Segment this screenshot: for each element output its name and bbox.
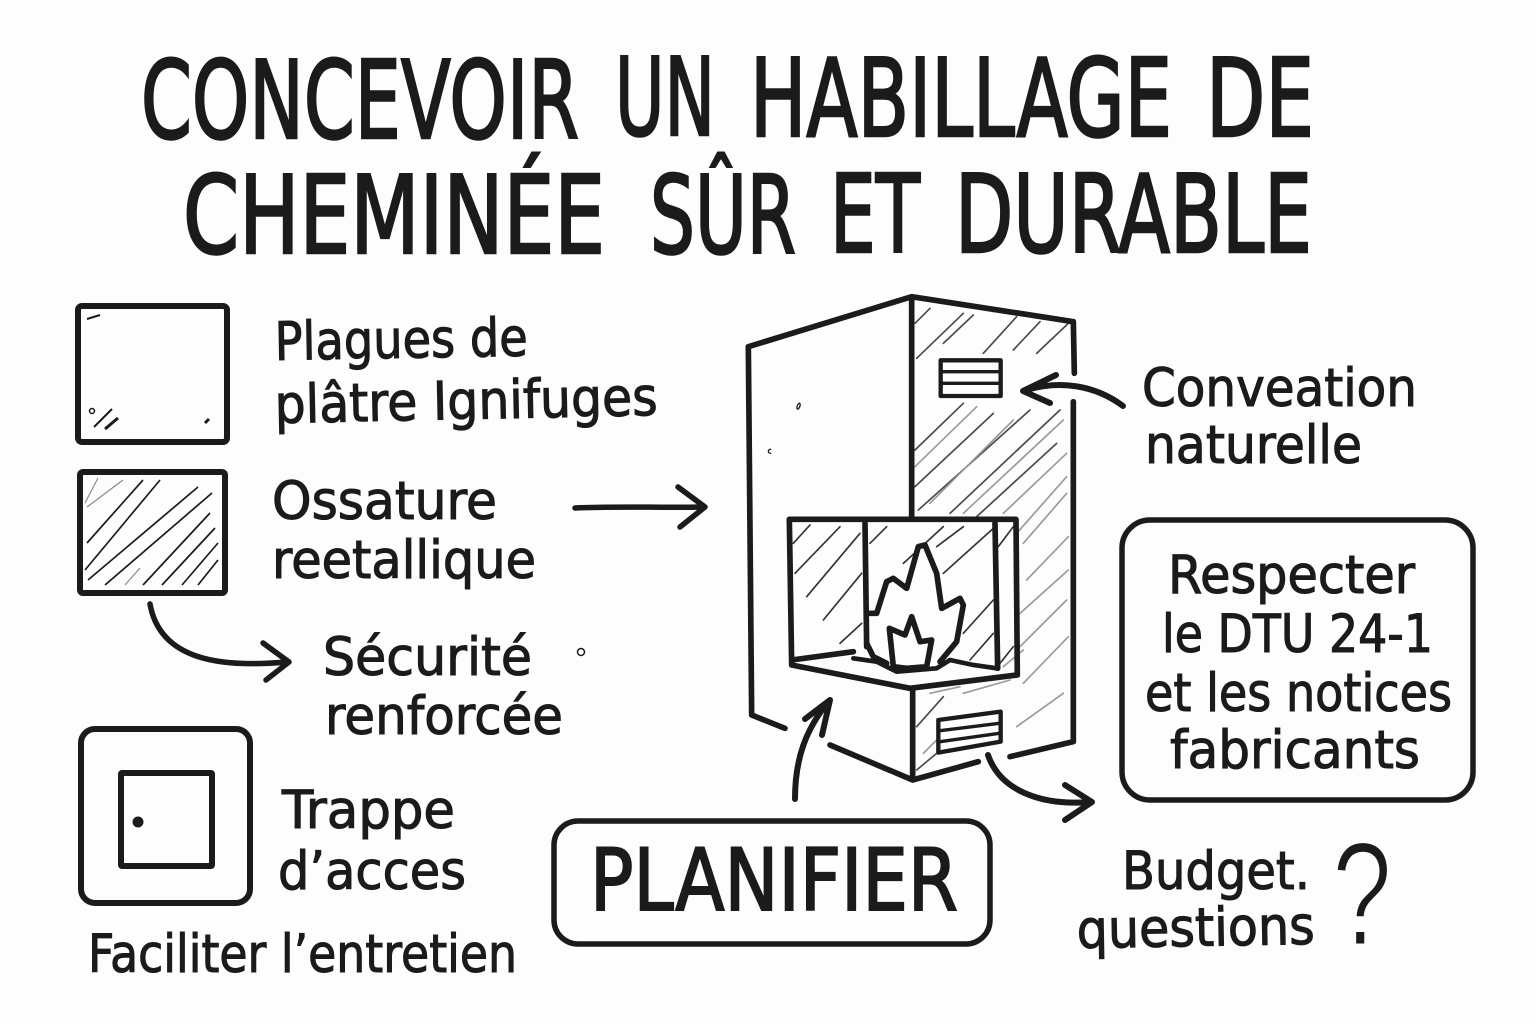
callout: DTU: Respecter	[1168, 545, 1415, 606]
label: budget questions: Budget.	[1122, 841, 1310, 902]
arrow: planifier to chimney	[795, 700, 830, 799]
title: UN	[615, 36, 715, 161]
label: trappe d'accès	[278, 780, 466, 902]
small dot	[578, 648, 584, 656]
vent: bottom	[938, 712, 1001, 753]
title: SÛR	[650, 152, 796, 279]
label: sécurité renforcée: renforcée	[325, 686, 563, 747]
label: ossature métallique: reetallique	[272, 530, 536, 591]
illustration: fireplace enclosure	[748, 297, 1074, 780]
callout: DTU: et les notices	[1145, 663, 1452, 724]
title: HABILLAGE	[750, 37, 1172, 162]
callout: DTU: fabricants	[1170, 720, 1420, 781]
label: plaques de plâtre: plâtre Ignifuges	[274, 367, 658, 436]
icon: flame	[867, 545, 963, 668]
hatching: side wall	[915, 308, 1068, 770]
label: convection naturelle: Conveation	[1142, 358, 1417, 419]
label: convection naturelle: naturelle	[1145, 415, 1362, 476]
label: budget questions: questions	[1076, 896, 1315, 961]
arrow: to sécurité	[150, 604, 289, 680]
title: ET	[830, 153, 921, 278]
title: CONCEVOIR	[141, 39, 579, 164]
label: plaques de plâtre	[274, 308, 658, 436]
panel: metal frame sample	[80, 472, 225, 593]
outer outline	[748, 297, 1074, 780]
label: convection naturelle	[1142, 358, 1417, 476]
label: trappe d'accès: Trappe	[281, 780, 455, 841]
specks	[768, 403, 800, 453]
label: budget questions	[1076, 812, 1392, 977]
label: ossature métallique	[272, 471, 536, 591]
label: ossature métallique: Ossature	[272, 471, 497, 532]
label: plaques de plâtre: Plagues de	[274, 308, 528, 373]
hatching: firebox	[793, 525, 1013, 663]
label: sécurité renforcée	[323, 627, 563, 747]
title: CHEMINÉE	[183, 152, 605, 279]
label: sécurité renforcée: Sécurité	[323, 627, 532, 688]
embers	[853, 658, 997, 672]
title	[141, 36, 1314, 279]
arrow: convection	[1023, 375, 1123, 406]
label: faciliter l'entretien: Faciliter l’entretien	[88, 924, 517, 985]
callout: DTU: le DTU 24-1	[1162, 604, 1433, 665]
button: planifier	[554, 821, 990, 944]
title: DURABLE	[955, 153, 1312, 278]
panel: plasterboard sample	[78, 306, 227, 442]
button: planifier: PLANIFIER	[590, 831, 958, 931]
title: DE	[1206, 37, 1314, 162]
arrow: vent to budget	[988, 755, 1092, 820]
arrow: ossature to chimney	[575, 487, 705, 527]
firebox frame	[789, 519, 1017, 688]
callout: DTU	[1122, 520, 1473, 800]
icon: access hatch	[81, 729, 250, 903]
vent: top	[941, 360, 1001, 396]
label: trappe d'accès: d’acces	[278, 841, 466, 902]
label: budget questions: ?	[1332, 812, 1392, 977]
